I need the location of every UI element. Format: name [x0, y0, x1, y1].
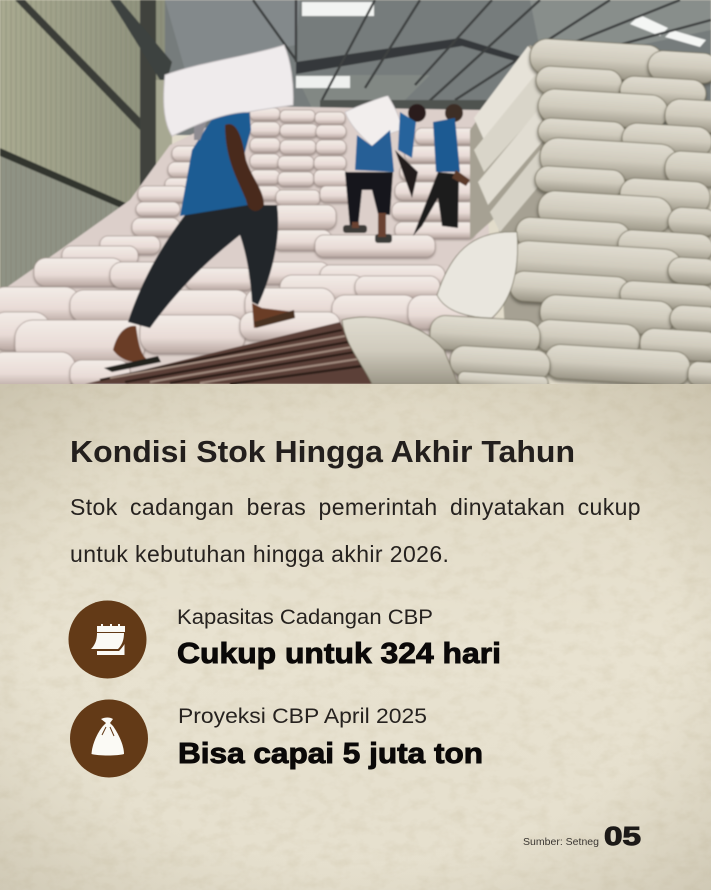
body paragraph: [70, 494, 641, 567]
body paragraph: untuk kebutuhan hingga akhir 2026.: [70, 541, 449, 567]
title: Kondisi Stok Hingga Akhir Tahun: [70, 435, 575, 469]
stat: capacity: [68, 600, 501, 678]
main worker carrying sack: [104, 45, 295, 372]
paper background: [0, 384, 711, 890]
centre bag pile: [0, 106, 500, 388]
background workers: [343, 96, 470, 243]
body paragraph: Stok cadangan beras pemerintah dinyatakan cukup: [70, 494, 641, 520]
icon: calendar: [68, 600, 146, 678]
photo: warehouse workers carrying rice sacks: [0, 0, 711, 391]
label: projection: Proyeksi CBP April 2025: [178, 705, 427, 728]
icon: rice sack: [70, 700, 148, 778]
label: capacity: Kapasitas Cadangan CBP: [177, 606, 433, 629]
value: capacity: Cukup untuk 324 hari: [177, 638, 501, 670]
page number: 05: [604, 821, 641, 851]
stat: projection: [70, 700, 483, 778]
source note: Sumber: Setneg: [523, 836, 599, 848]
right bag stack: [342, 38, 711, 391]
warehouse left wall: [0, 0, 172, 290]
warehouse ceiling: [130, 0, 711, 135]
wooden pallet: [85, 322, 372, 384]
value: projection: Bisa capai 5 juta ton: [178, 738, 483, 770]
